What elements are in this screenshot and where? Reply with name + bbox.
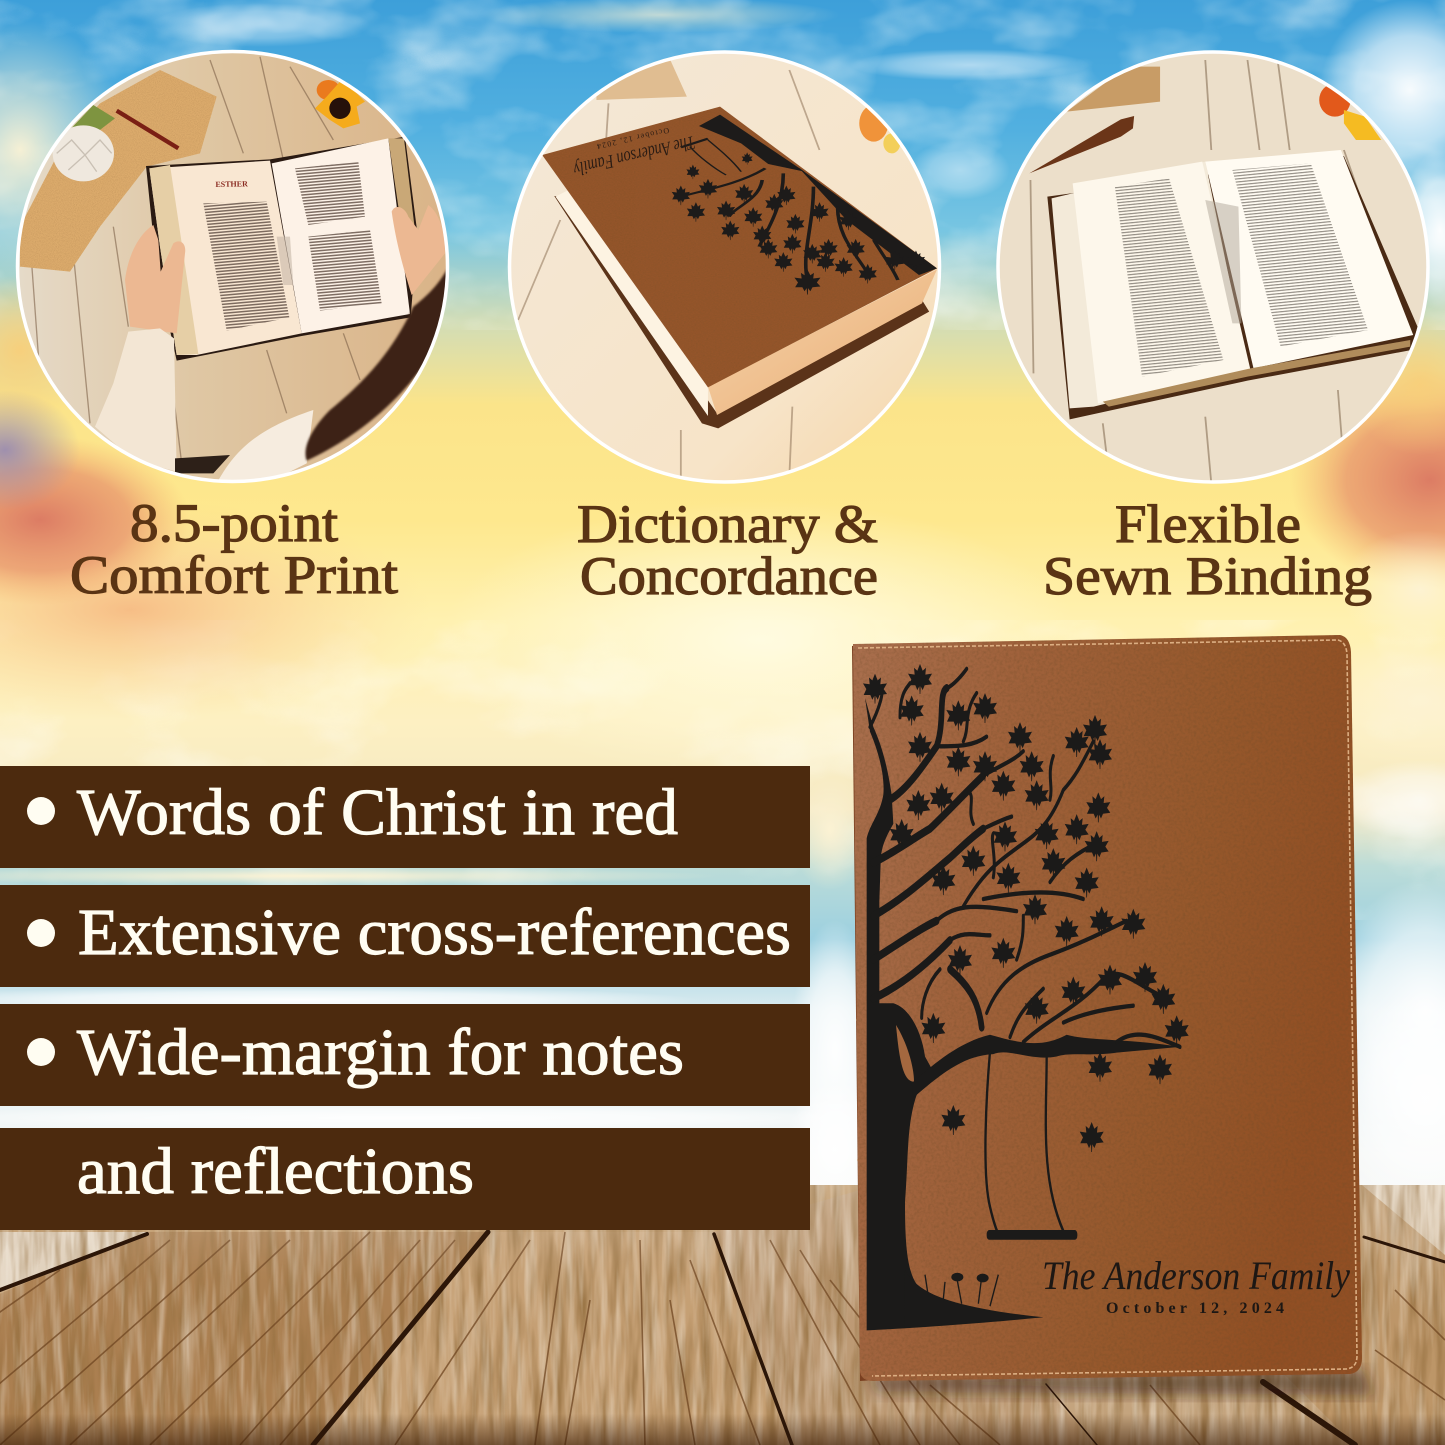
- sunflower: [315, 80, 365, 128]
- cover: [853, 635, 1362, 1381]
- caption: Flexible Sewn Binding: Flexible: [1115, 494, 1301, 554]
- photo circle: closed leather Bible: [500, 40, 958, 490]
- pen: [117, 111, 178, 148]
- caption: Dictionary & Concordance: [577, 494, 878, 606]
- photo circle: Bible with sewn binding lying open: [994, 40, 1440, 490]
- burlap cloth: [20, 70, 217, 272]
- caption: 8.5-point Comfort Print: [70, 493, 398, 605]
- feature bar: Wide-margin for notes: [0, 1004, 810, 1106]
- page heading: ESTHER: [215, 179, 248, 189]
- wooden table: [0, 1185, 1445, 1445]
- open Bible: [1047, 150, 1417, 419]
- open Bible: [146, 137, 417, 361]
- sunflower: [1319, 83, 1381, 140]
- caption: Flexible Sewn Binding: [1043, 494, 1372, 606]
- vase with leaf: [53, 105, 115, 181]
- sweater back: [217, 410, 313, 483]
- caption: Flexible Sewn Binding: Sewn Binding: [1043, 546, 1372, 606]
- feature bar: Extensive cross-references: [0, 885, 810, 987]
- feature bar: Words of Christ in red: Words of Christ in red: [77, 776, 678, 849]
- sweater sleeve: [95, 328, 177, 472]
- caption: Dictionary & Concordance: Dictionary &: [577, 494, 878, 554]
- feature bar: and reflections: [0, 1128, 810, 1230]
- hair: [305, 267, 448, 461]
- grass and flowers: [905, 1270, 1043, 1328]
- caption: 8.5-point Comfort Print: 8.5-point: [130, 493, 338, 553]
- feature bar: and reflections: and reflections: [77, 1135, 474, 1208]
- swing: [985, 1052, 1077, 1240]
- pen: [1029, 116, 1134, 173]
- photo circle: reading the open Bible: [16, 50, 450, 484]
- feature bar: Words of Christ in red: [0, 766, 810, 868]
- personalized leather Bible: [852, 635, 1375, 1395]
- feature bar: Wide-margin for notes: Wide-margin for notes: [77, 1016, 684, 1089]
- feature bar: Extensive cross-references: Extensive cross-references: [78, 896, 791, 969]
- top cover: [542, 107, 937, 387]
- tree with swing: [863, 664, 1189, 1330]
- cover tree art: [672, 115, 937, 294]
- spine: [852, 644, 875, 1381]
- caption: Dictionary & Concordance: Concordance: [580, 546, 878, 606]
- date: October 12, 2024: [1106, 1300, 1284, 1317]
- caption: 8.5-point Comfort Print: Comfort Print: [70, 545, 398, 605]
- page edges and bottom cover: [554, 187, 937, 428]
- cover inscription: October 12, 2024: [595, 126, 670, 151]
- cover inscription: [571, 126, 697, 180]
- stitching: [858, 640, 1357, 1376]
- hands: [125, 205, 445, 333]
- family name: The Anderson Family: [1042, 1253, 1350, 1298]
- cover inscription: The Anderson Family: [571, 131, 697, 180]
